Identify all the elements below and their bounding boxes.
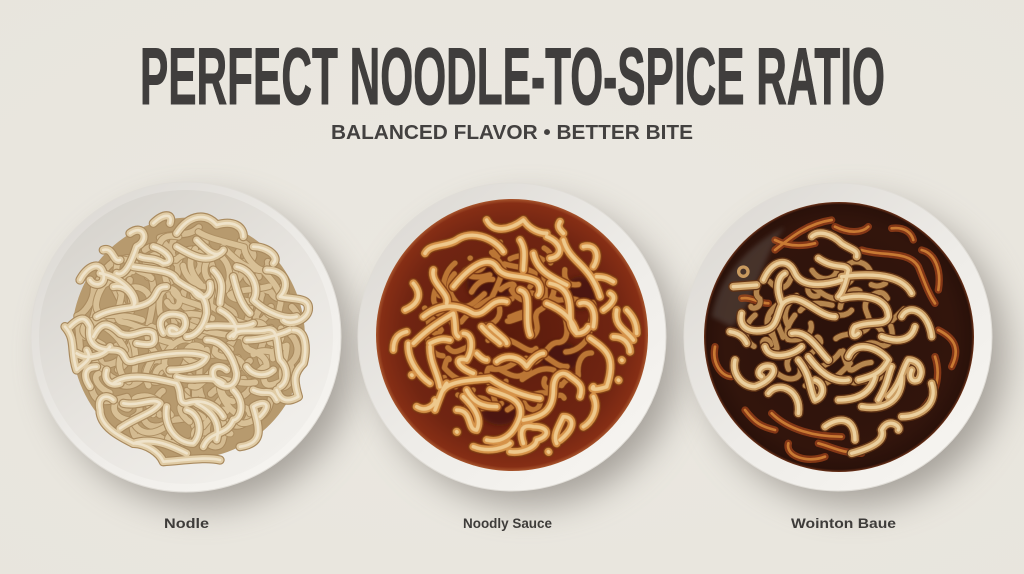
label: noodle: Nodle [164, 515, 209, 531]
label: noodly sauce: Noodly Sauce [463, 515, 552, 531]
bowl: wonton sauce [684, 183, 1005, 505]
noodles in dark sauce [712, 218, 956, 459]
dark sauce [704, 202, 974, 472]
subtitle: BALANCED FLAVOR • BETTER BITE [331, 122, 693, 144]
bowl: noodly sauce [358, 183, 679, 505]
label: wonton sauce: Wointon Baue [791, 515, 896, 531]
bowl: plain noodles [31, 182, 354, 506]
red sauce [376, 199, 648, 471]
noodle mound [57, 205, 323, 472]
noodles in sauce [393, 211, 637, 452]
